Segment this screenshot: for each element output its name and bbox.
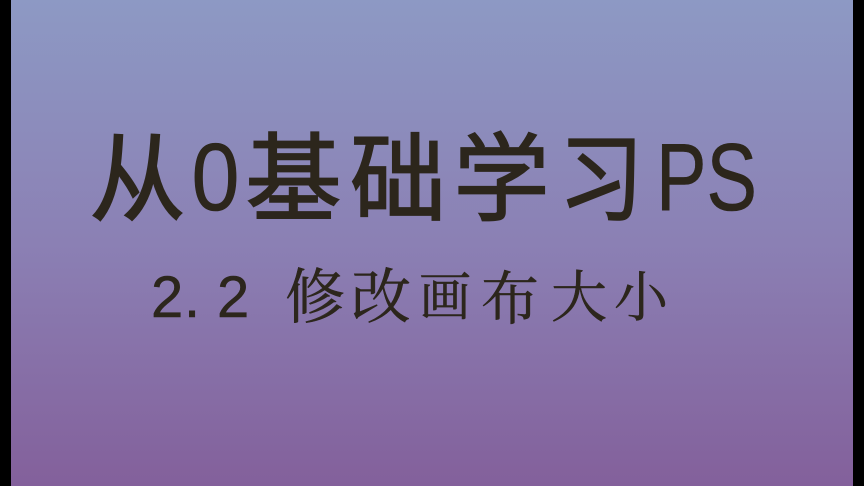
subtitle: 小: [614, 255, 670, 332]
subtitle: 布: [481, 252, 539, 336]
title: 础: [350, 102, 446, 241]
title: 学: [454, 102, 550, 241]
subtitle: 大: [551, 254, 607, 334]
title: 0: [192, 124, 240, 231]
subtitle: 修: [285, 250, 345, 336]
title: PS: [656, 124, 757, 231]
subtitle: 2.2: [151, 265, 249, 330]
title: [90, 102, 757, 241]
title: 习: [559, 102, 643, 241]
title: 基: [246, 102, 342, 241]
subtitle: 画: [419, 255, 471, 330]
subtitle: 改: [351, 250, 411, 336]
subtitle: [151, 250, 670, 336]
title: 从: [90, 102, 186, 241]
